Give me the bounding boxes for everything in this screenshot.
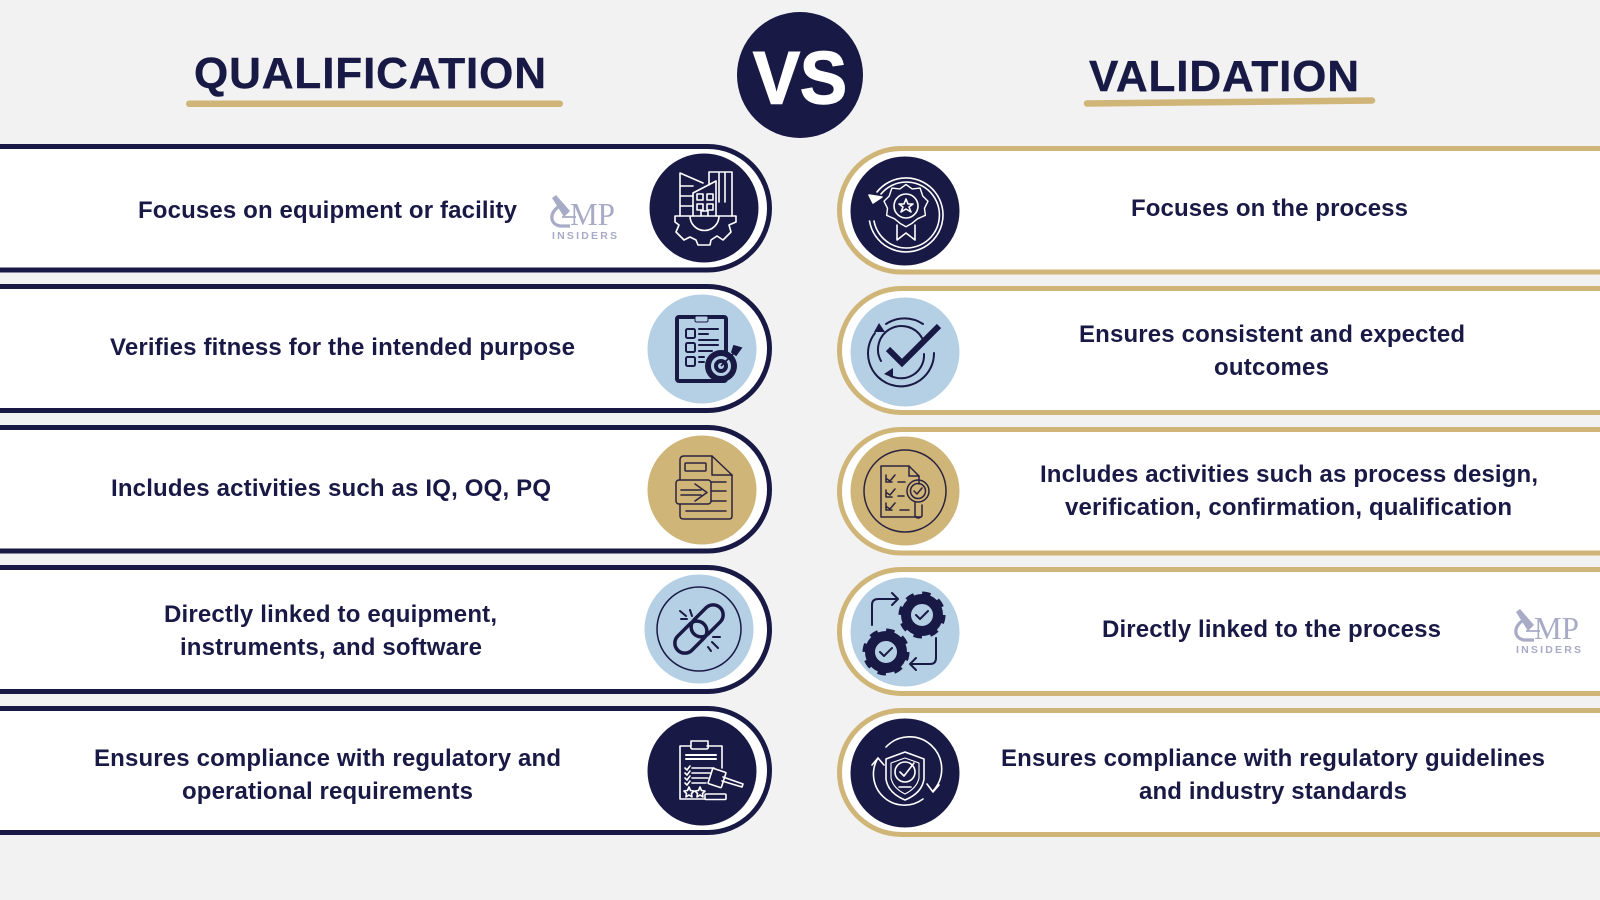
heading: validation: VALIDATION [1089, 52, 1359, 101]
text: ensures compliance regulatory and operational: operational requirements [182, 778, 473, 805]
text: ensures consistent [1079, 321, 1465, 381]
icon: shield cycle [850, 718, 960, 828]
panel: qualification row 2 [0, 286, 770, 410]
icon: checklist and magnifier [850, 436, 960, 546]
panel: qualification row 1 [0, 146, 770, 270]
text: includes activities process design [1040, 461, 1538, 521]
logo: GMP Insiders [552, 195, 617, 242]
text: ensures compliance regulatory and operational: Ensures compliance with regulatory and [94, 745, 561, 772]
vs badge: VS [753, 36, 847, 120]
icon: clipboard and gavel [648, 716, 756, 826]
text: focuses on the process: Focuses on the process [1131, 195, 1408, 222]
panel: validation row 3 [840, 430, 1600, 553]
text: directly linked to equipment [164, 601, 497, 661]
icon: document with arrow [648, 436, 756, 544]
text: includes activities IQ OQ PQ: Includes activities such as IQ, OQ, PQ [111, 475, 551, 502]
panel: qualification row 3 [0, 428, 770, 551]
text: includes activities process design: Includes activities such as process design, [1040, 461, 1538, 488]
text: ensures consistent: outcomes [1214, 354, 1329, 381]
vs badge [737, 12, 863, 138]
icon: chain link [644, 574, 754, 684]
text: ensures compliance guidelines [1001, 745, 1545, 805]
text: verifies fitness: Verifies fitness for the intended purpose [110, 334, 575, 361]
logo: GMP Insiders right [1516, 609, 1581, 656]
text: ensures consistent: Ensures consistent and expected [1079, 321, 1465, 348]
icon: clipboard and target [648, 294, 756, 404]
panel: qualification row 5 [0, 708, 770, 832]
panel: qualification row 4 [0, 568, 770, 692]
icon: cycle check [850, 298, 960, 406]
text: directly linked to equipment: Directly linked to equipment, [164, 601, 497, 628]
text: includes activities process design: verification, confirmation, qualification [1065, 494, 1512, 521]
panel: validation row 4 [840, 570, 1600, 694]
icon: building and gear [650, 154, 758, 262]
text: ensures compliance guidelines: Ensures compliance with regulatory guidelines [1001, 745, 1545, 772]
icon: rosette badge [850, 156, 960, 266]
text: focuses on equipment: Focuses on equipment or facility [138, 197, 518, 224]
text: directly linked to process: Directly linked to the process [1102, 616, 1441, 643]
text: directly linked to equipment: instruments, and software [180, 634, 482, 661]
text: ensures compliance regulatory and operational [94, 745, 561, 805]
panel: validation row 5 [840, 710, 1600, 834]
panel: validation row 2 [840, 288, 1600, 412]
text: ensures compliance guidelines: and industry standards [1139, 778, 1407, 805]
heading: qualification: QUALIFICATION [194, 49, 546, 98]
panel: validation row 1 [840, 148, 1600, 272]
icon: process gears [850, 578, 960, 686]
